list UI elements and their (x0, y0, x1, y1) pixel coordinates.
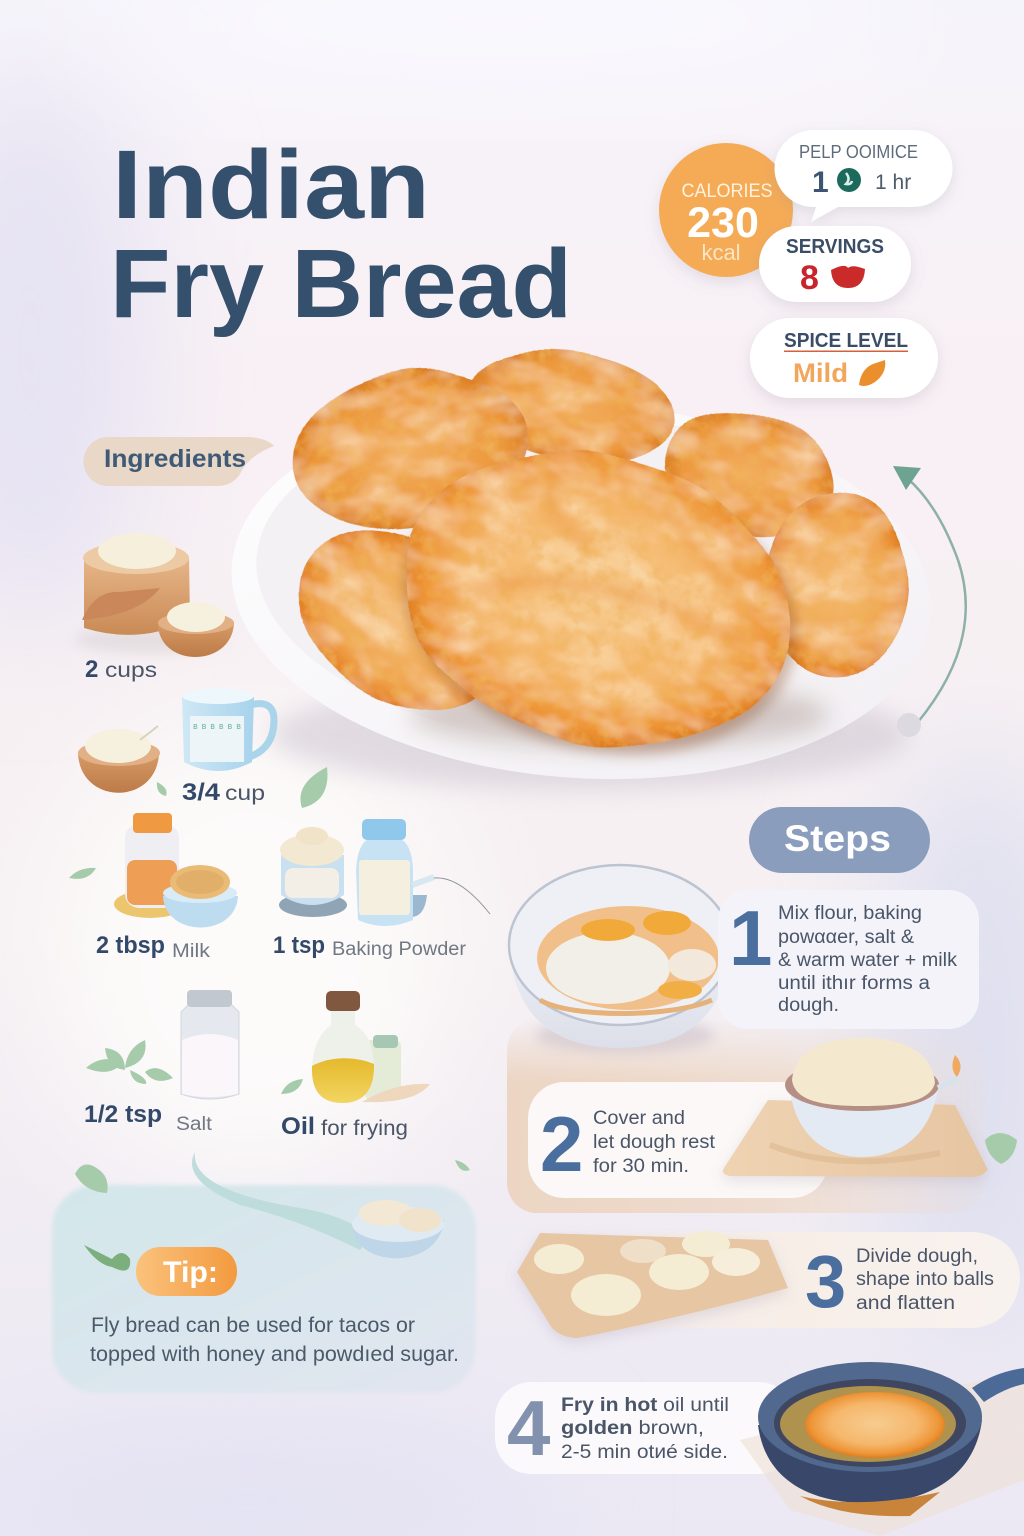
step 1 bowl (509, 865, 731, 1053)
bread: far right (764, 493, 908, 677)
tip badge (136, 1247, 237, 1296)
tip badge: Tip: (163, 1256, 218, 1289)
title: Indian (112, 130, 430, 239)
ingredient: salt jar (181, 990, 239, 1099)
icon: clock leaf (837, 168, 861, 192)
arrow: curved (893, 466, 966, 737)
label: 2 tbsp milk: 2 tbsp (96, 932, 165, 959)
step 3 card: and flatten (856, 1293, 955, 1314)
step 1 card: until ithır forms a (778, 973, 930, 994)
step 2 card: Cover and (593, 1108, 685, 1129)
decorative swoosh (192, 1152, 370, 1250)
icon: chili (859, 360, 885, 386)
step 4 card: Fry in hot oil until (561, 1395, 729, 1416)
step 3 image: dough balls on board (517, 1231, 788, 1338)
step 4 card (495, 1382, 795, 1474)
label: oil for frying: Oil (281, 1113, 315, 1140)
calories badge: kcal (701, 240, 741, 265)
icon: tip leaf (84, 1245, 130, 1271)
ingredient: bowl (78, 726, 160, 793)
step 2 card: 2 (540, 1100, 583, 1188)
step 4 image: frying pan (740, 1362, 1024, 1536)
step 1 card: Mix flour, baking (778, 903, 922, 924)
calories badge: 230 (687, 199, 759, 247)
label: 1 tsp baking powder (273, 932, 467, 960)
tip text (90, 1314, 459, 1366)
icon: small leaf right of tip (455, 1160, 470, 1171)
spice level bubble: SPICE LEVEL (784, 329, 908, 352)
ingredient: oil bottle (281, 991, 430, 1103)
label: 3/4 cup: cup (225, 782, 265, 805)
icon: small leaf (157, 782, 167, 796)
bread: lower left (262, 491, 534, 749)
step 3 card: 3 (805, 1240, 846, 1323)
label: 2 tbsp milk: Milk (172, 941, 211, 962)
step 4 card: 2-5 min otиé side. (561, 1442, 728, 1463)
plate (219, 378, 943, 802)
label: 2 cups: 2 (85, 656, 98, 683)
label: 1 tsp baking powder: 1 tsp (273, 932, 325, 959)
icon: leaf above tip (75, 1165, 108, 1193)
step 2 card: for 30 min. (593, 1156, 689, 1177)
spice level bubble (750, 318, 938, 398)
label: 1/2 tsp salt: 1/2 tsp (84, 1101, 162, 1128)
step 3 card (560, 1232, 1020, 1328)
label: 3/4 cup (182, 779, 265, 806)
label: 2 cups: cups (105, 659, 157, 682)
calories badge (659, 143, 793, 277)
ingredient: milk mug (182, 688, 274, 771)
bread: right (649, 393, 847, 555)
calories badge: CALORIES (682, 181, 772, 202)
ingredients label: Ingredients (104, 445, 246, 473)
step 2 card: let dough rest (593, 1132, 716, 1153)
bread: left top (280, 353, 540, 547)
label: oil for frying: for frying (321, 1117, 408, 1140)
steps heading (749, 807, 930, 873)
label: 2 tbsp milk (96, 932, 211, 962)
servings bubble: 8 (800, 259, 819, 297)
tip text: topped with honey and powdıed sugar. (90, 1343, 459, 1366)
tip text: Fly bread can be used for tacos or (91, 1314, 415, 1337)
servings bubble (759, 226, 911, 302)
label: 1/2 tsp salt (84, 1101, 213, 1135)
icon: leaf (300, 767, 327, 808)
label: 2 cups (85, 656, 157, 683)
step 1 card: powααer, salt & (778, 927, 914, 948)
icon: red bowl (831, 266, 865, 288)
ingredient: herbs (86, 1040, 173, 1084)
steps heading: Steps (784, 818, 891, 859)
steps backdrop (507, 1020, 985, 1213)
bread: main (370, 412, 824, 788)
step 1 card: dough. (778, 995, 839, 1016)
icon: bowl of dough (352, 1200, 444, 1258)
icon: leaf right (985, 1133, 1017, 1164)
ingredient: milk mug: ꓐ ꓐ ꓐ ꓐ ꓐ ꓐ (193, 724, 241, 731)
bread: back (457, 338, 683, 478)
plate of fry bread (219, 338, 943, 802)
title: Fry Bread (110, 229, 572, 338)
label: 1 tsp baking powder: Baking Powder (332, 939, 467, 960)
step 4 card: golden brown, (561, 1418, 704, 1439)
label: 1/2 tsp salt: Salt (176, 1114, 213, 1135)
servings bubble: SERVINGS (786, 236, 884, 258)
step 2 image: dough on board (723, 1038, 988, 1177)
prep time bubble: PELP OOIMICE (799, 142, 918, 162)
prep time bubble (775, 130, 952, 222)
prep time bubble: 1 hr (875, 171, 911, 194)
prep time bubble: 1 (812, 166, 829, 199)
step 3 card: Divide dough, (856, 1246, 978, 1267)
ingredient: oil jar and nuts (114, 813, 238, 928)
icon: leaf left (69, 868, 96, 879)
step 1 card (718, 890, 979, 1029)
ingredient: baking powder (279, 819, 490, 926)
title (110, 130, 572, 338)
spice level bubble: Mild (793, 358, 848, 388)
step 1 card: 1 (729, 894, 772, 982)
ingredients label (83, 437, 274, 486)
step 1 card: & warm water + milk (778, 950, 958, 971)
step 2 card (528, 1082, 828, 1198)
ingredient: flour (75, 533, 234, 657)
label: oil for frying (281, 1113, 408, 1140)
tip panel (52, 1152, 476, 1393)
step 3 card: shape into balls (856, 1269, 994, 1290)
step 4 card: 4 (507, 1384, 550, 1472)
label: 3/4 cup: 3/4 (182, 779, 221, 806)
